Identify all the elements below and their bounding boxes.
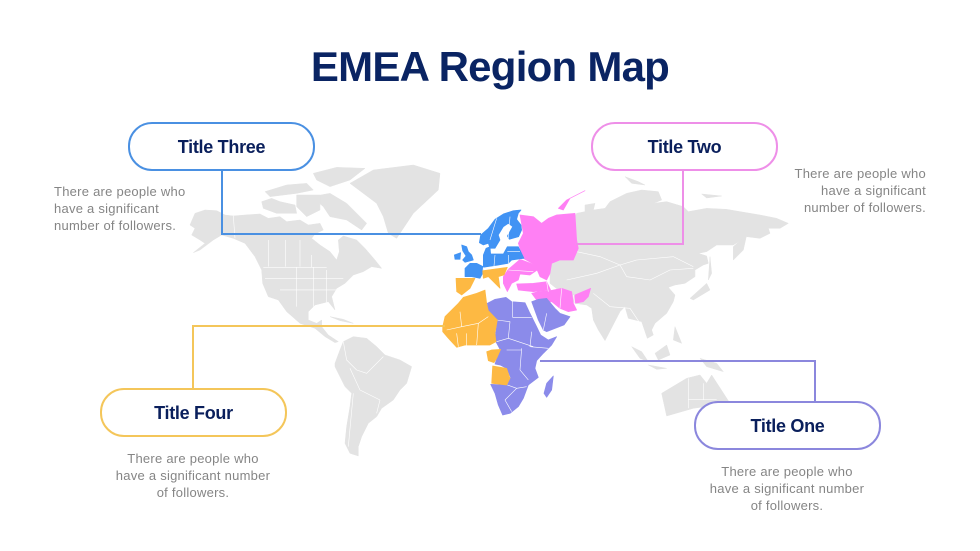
text: Title Four description: There are people who <box>127 451 259 466</box>
text: Title One description: of followers. <box>751 498 823 513</box>
text: Title One description <box>710 464 864 513</box>
pill: Title Four <box>100 388 287 437</box>
text: Title Two description <box>794 166 926 215</box>
connector: blue <box>222 171 481 234</box>
text: Title Two description: number of followers. <box>804 200 926 215</box>
text: Title Two description: have a significant <box>821 183 926 198</box>
pill: Title Four: Title Four <box>154 403 233 423</box>
connector: yellow <box>193 326 445 388</box>
pill: Title One <box>694 401 881 450</box>
text: Title Three description: There are people who <box>54 184 185 199</box>
connector: purple <box>540 361 815 401</box>
text: Title One description: There are people who <box>721 464 853 479</box>
text: Title One description: have a significant number <box>710 481 864 496</box>
text: Title Three description: have a significant <box>54 201 159 216</box>
orange region: West Africa, Gabon and Angola <box>443 290 510 385</box>
text: Title Two description: There are people who <box>795 166 926 181</box>
text: Title Four description <box>116 451 270 500</box>
text: Title Three description <box>54 184 185 233</box>
orange region: Spain and Italy <box>456 267 507 295</box>
text: Title Four description: of followers. <box>157 485 229 500</box>
blue region: Western and Northern Europe <box>454 210 524 278</box>
pill: Title Two: Title Two <box>648 137 721 157</box>
Africa and Arabia regions <box>443 290 570 415</box>
purple region: Africa and Arabia <box>487 297 570 415</box>
grey landmass: Asia and Australia <box>550 177 788 416</box>
pink region: Russia, Eastern Europe, Middle East <box>503 191 591 312</box>
grey landmass: Americas and Greenland <box>190 165 440 456</box>
pill: Title Three <box>128 122 315 171</box>
title: EMEA Region Map <box>311 43 669 90</box>
text: Title Three description: number of followers. <box>54 218 176 233</box>
Europe and Middle East regions <box>454 191 591 312</box>
text: Title Four description: have a significant number <box>116 468 270 483</box>
pill: Title Two <box>591 122 778 171</box>
pill: Title Three: Title Three <box>178 137 265 157</box>
connector: pink <box>576 170 683 244</box>
pill: Title One: Title One <box>750 416 824 436</box>
